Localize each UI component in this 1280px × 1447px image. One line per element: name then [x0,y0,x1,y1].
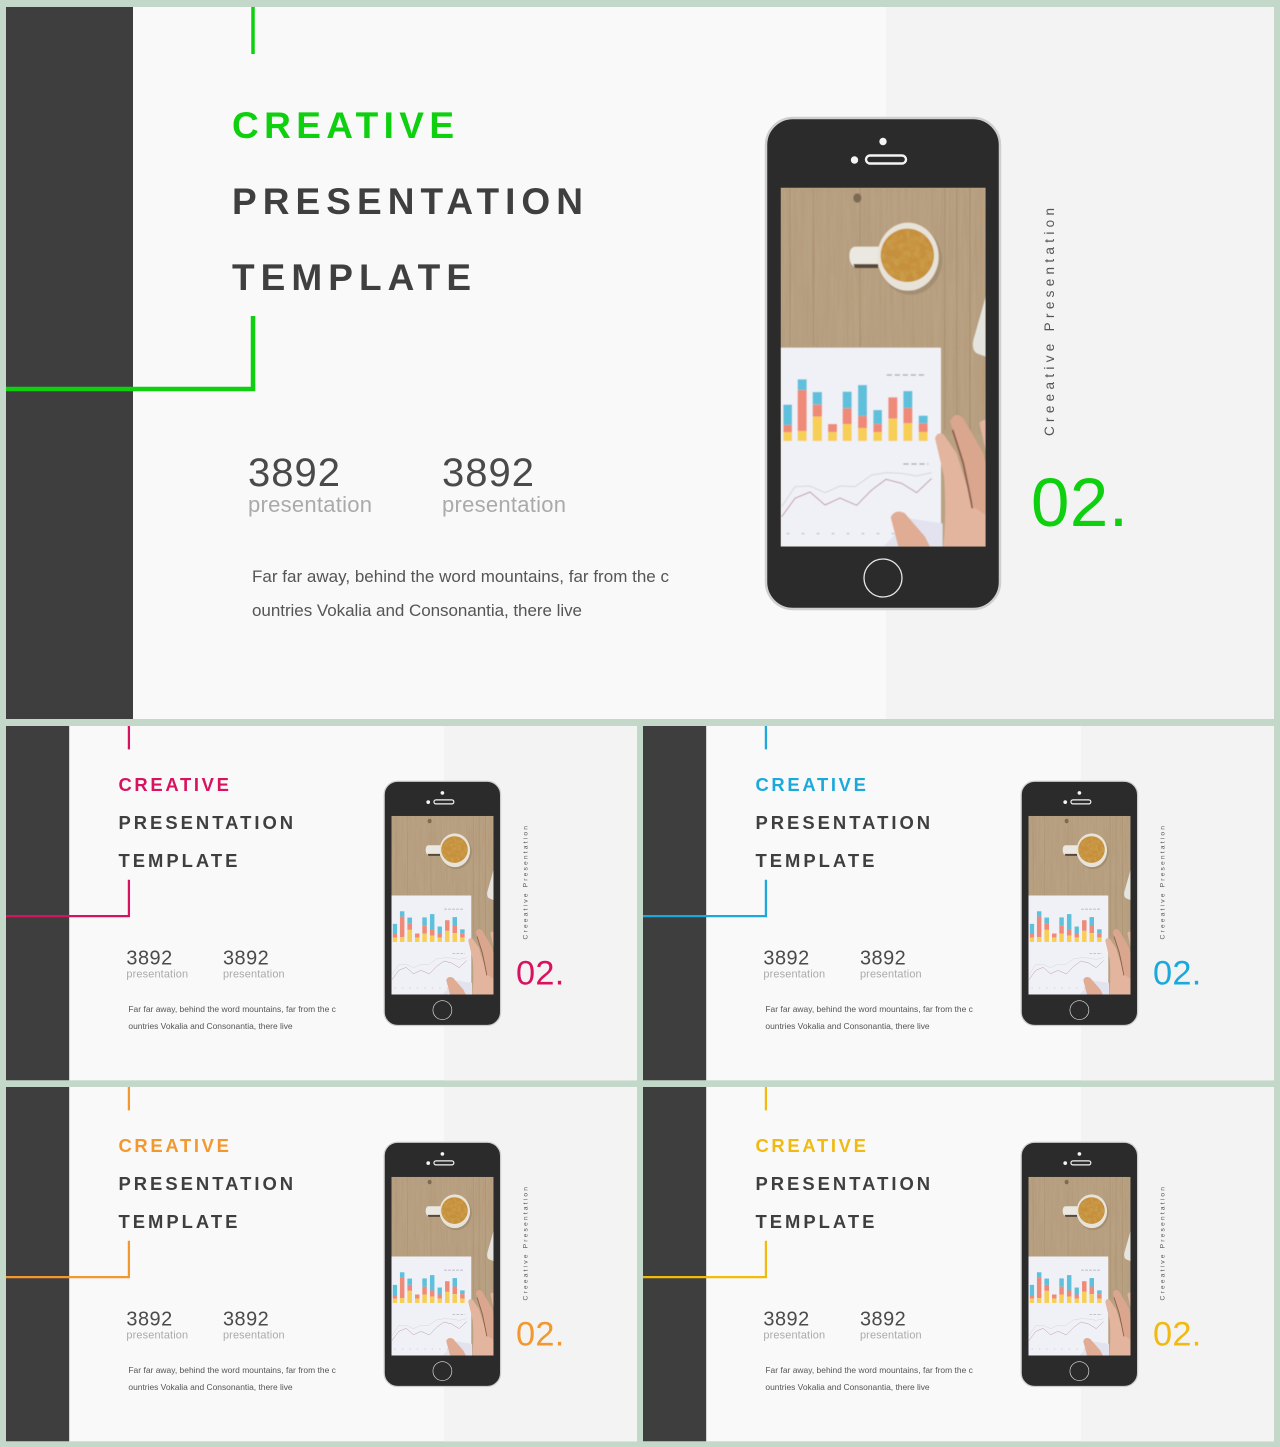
body text [252,567,670,620]
panel: small orange slide [6,1087,637,1441]
panel: small pink slide [6,726,637,1080]
body text: ountries Vokalia and Consonantia, there live [128,1021,293,1031]
heading: TEMPLATE [118,850,237,871]
slide number: 02. [1153,1315,1201,1353]
vertical caption: Creeative Presentation [1159,826,1166,939]
slide number: 02. [516,954,564,992]
vertical caption: Creeative Presentation [522,1187,529,1300]
vertical caption: Creeative Presentation [522,826,529,939]
stat 1 [248,451,372,517]
slide number: 02. [516,1315,564,1353]
heading: TEMPLATE [755,850,874,871]
accent corner line [6,316,253,389]
heading: PRESENTATION [232,181,583,222]
stat 1: presentation [248,492,372,517]
stats: presentation [860,1329,922,1341]
stat 1: 3892 [248,451,340,495]
stat 2: presentation [442,492,566,517]
stats: 3892 [223,947,269,969]
stats: 3892 [763,1308,809,1330]
stat 2 [442,451,566,517]
stats [126,947,285,980]
body text [128,1004,336,1031]
heading: CREATIVE [755,1135,866,1156]
body text: Far far away, behind the word mountains, far from the c [128,1365,336,1375]
slide number: 02. [1031,464,1128,541]
panel: small yellow slide [643,1087,1274,1441]
stats: 3892 [126,947,172,969]
body text: Far far away, behind the word mountains, far from the c [765,1365,973,1375]
body text [765,1004,973,1031]
phone mockup [384,781,501,1026]
stats: presentation [763,968,825,980]
stats: presentation [860,968,922,980]
heading [755,774,930,871]
stat 2: 3892 [442,451,534,495]
slide number: 02. [1153,954,1201,992]
body text [765,1365,973,1392]
stats [763,947,922,980]
accent corner line [6,1241,129,1277]
heading: CREATIVE [118,774,229,795]
heading [232,105,583,298]
stats: 3892 [860,1308,906,1330]
heading: PRESENTATION [118,1173,293,1194]
heading [755,1135,930,1232]
stats: presentation [223,968,285,980]
heading: PRESENTATION [755,1173,930,1194]
body text: ountries Vokalia and Consonantia, there live [765,1021,930,1031]
vertical caption: Creeative Presentation [1159,1187,1166,1300]
heading: CREATIVE [118,1135,229,1156]
stats [763,1308,922,1341]
heading: TEMPLATE [755,1211,874,1232]
stats: 3892 [763,947,809,969]
phone mockup with photo of desk and charts [766,118,1000,609]
body text: ountries Vokalia and Consonantia, there live [128,1382,293,1392]
phone mockup [384,1142,501,1387]
body text: Far far away, behind the word mountains, far from the c [765,1004,973,1014]
body text: Far far away, behind the word mountains, far from the c [252,567,670,586]
heading: TEMPLATE [118,1211,237,1232]
vertical caption: Creeative Presentation [1042,208,1057,436]
heading: CREATIVE [755,774,866,795]
body text: ountries Vokalia and Consonantia, there live [252,601,582,620]
stats: presentation [223,1329,285,1341]
stats: presentation [126,1329,188,1341]
stats: 3892 [860,947,906,969]
stats: 3892 [223,1308,269,1330]
heading: CREATIVE [232,105,454,146]
phone mockup [1021,781,1138,1026]
panel: small blue slide [643,726,1274,1080]
body text [128,1365,336,1392]
accent corner line [643,1241,766,1277]
heading [118,774,293,871]
panel: large green slide [6,7,1274,719]
stats: presentation [763,1329,825,1341]
stats [126,1308,285,1341]
accent corner line [643,880,766,916]
heading [118,1135,293,1232]
heading: PRESENTATION [755,812,930,833]
body text: Far far away, behind the word mountains, far from the c [128,1004,336,1014]
accent corner line [6,880,129,916]
heading: PRESENTATION [118,812,293,833]
stats: presentation [126,968,188,980]
body text: ountries Vokalia and Consonantia, there live [765,1382,930,1392]
phone mockup [1021,1142,1138,1387]
stats: 3892 [126,1308,172,1330]
heading: TEMPLATE [232,257,471,298]
